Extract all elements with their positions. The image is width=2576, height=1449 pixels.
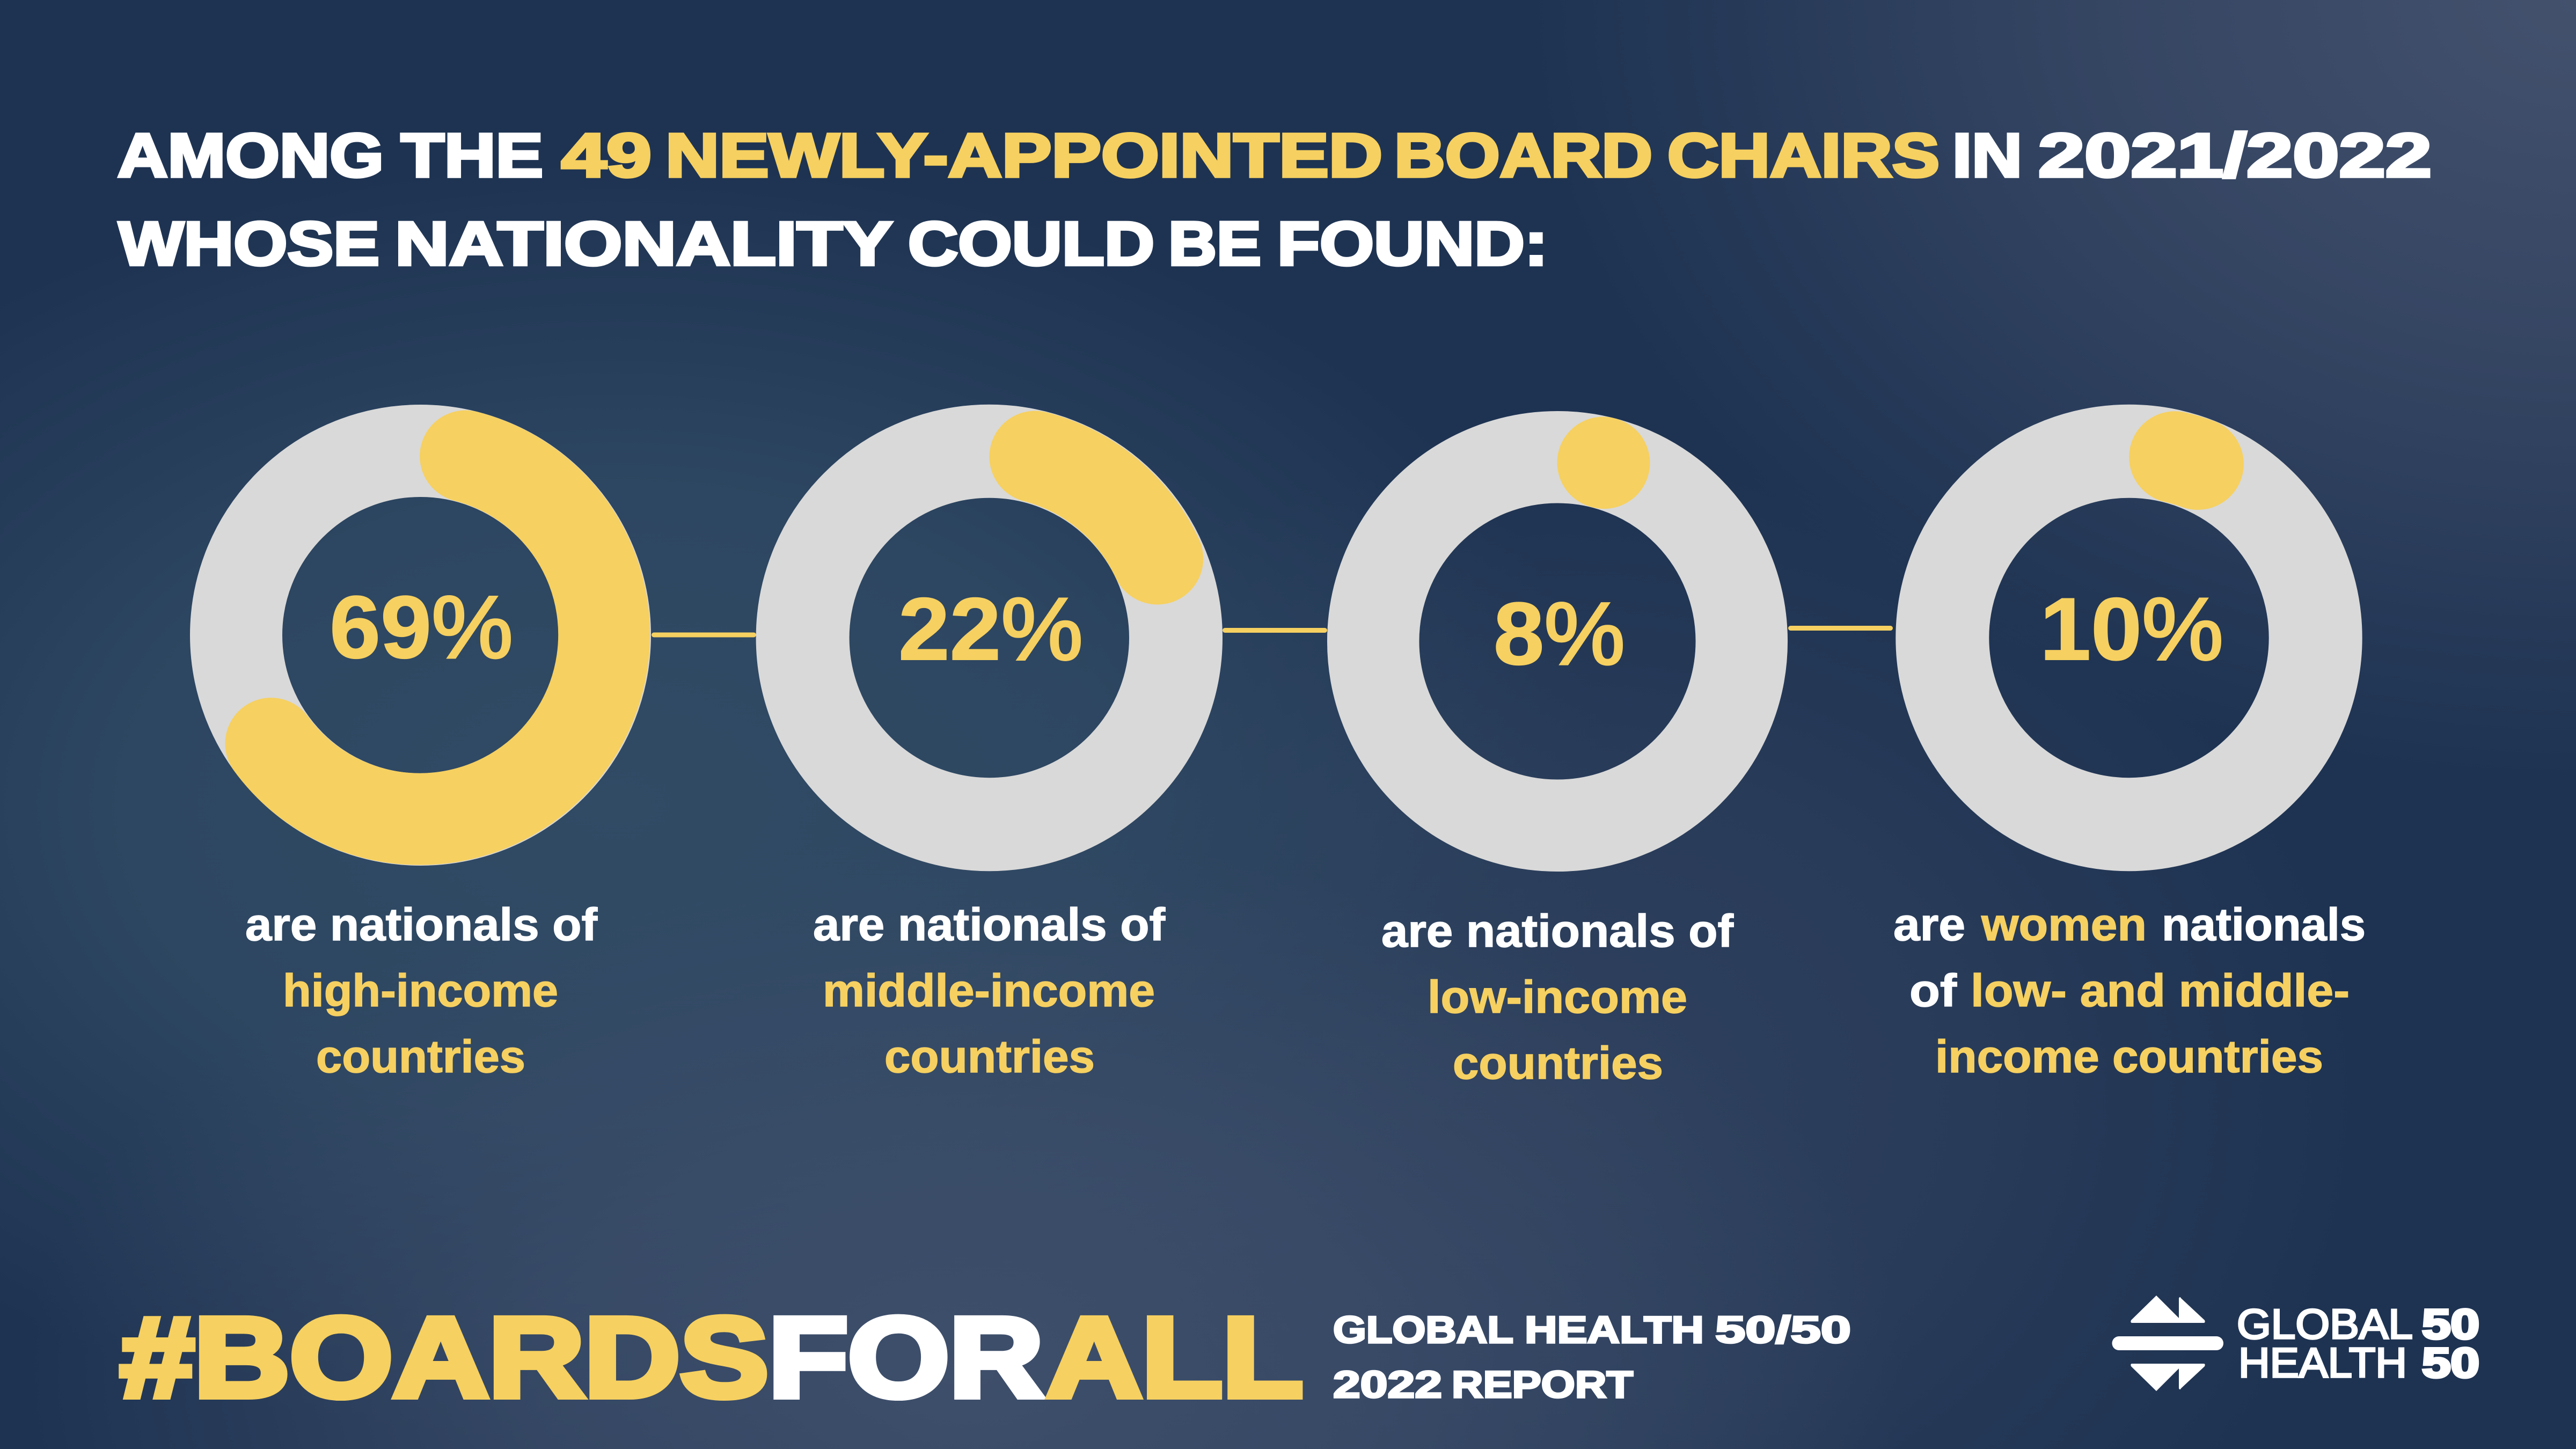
report credit: 2022 (1333, 1363, 1442, 1406)
label: high-income: are nationals of (245, 899, 598, 950)
label: low-income: are nationals of (1381, 906, 1734, 957)
report credit (1333, 1308, 1851, 1406)
label: high-income: countries (316, 1031, 525, 1082)
label: low-income (1381, 906, 1734, 1089)
donut chart: 22% middle-income (803, 451, 1176, 824)
label: middle-income: are nationals of (813, 899, 1166, 950)
donut chart: 10% women (1942, 451, 2316, 824)
donut chart: 8% low-income: 8% (1494, 584, 1625, 683)
title: NEWLY-APPOINTED (665, 121, 1382, 190)
title: NATIONALITY (395, 209, 892, 278)
logo wordmark: HEALTH (2238, 1339, 2407, 1386)
donut chart: 8% low-income (1373, 457, 1741, 825)
icon: logo mark (2112, 1296, 2223, 1391)
donut chart: 10% women: 10% (2040, 580, 2223, 678)
label: women nationals: income countries (1935, 1031, 2323, 1082)
hashtag (120, 1294, 1303, 1421)
label: middle-income: middle-income (823, 965, 1155, 1016)
report credit: GLOBAL (1333, 1308, 1513, 1351)
label: middle-income (813, 899, 1166, 1082)
title: BE (1168, 209, 1261, 278)
hashtag: #BOARDS (120, 1294, 769, 1421)
label: women nationals: of (1909, 965, 1957, 1016)
label: middle-income: countries (884, 1031, 1095, 1082)
report credit: HEALTH (1525, 1308, 1704, 1351)
donut chart: 69% high-income: 69% (330, 577, 513, 676)
title: WHOSE (119, 209, 379, 278)
title: AMONG (118, 121, 384, 190)
logo wordmark: 50 (2422, 1339, 2479, 1386)
title: CHAIRS (1667, 121, 1940, 190)
label: low-income: countries (1453, 1038, 1663, 1089)
title: IN (1952, 121, 2022, 190)
logo wordmark: GLOBAL (2237, 1300, 2413, 1348)
report credit: 50/50 (1715, 1308, 1851, 1351)
donut chart: 22% middle-income: 22% (898, 580, 1083, 678)
logo: Global Health 50/50 (2112, 1296, 2479, 1391)
hashtag: FOR (769, 1294, 1043, 1421)
label: women nationals: women (1981, 899, 2147, 950)
label: low-income: low-income (1428, 972, 1687, 1023)
title: THE (401, 121, 543, 190)
title: BOARD (1394, 121, 1652, 190)
title: 2021/2022 (2038, 121, 2432, 190)
label: women nationals (1893, 899, 2366, 1082)
title (118, 121, 2432, 278)
logo wordmark: 50 (2422, 1300, 2479, 1348)
label: women nationals: nationals (2162, 899, 2366, 950)
label: high-income: high-income (283, 965, 558, 1016)
donut chart: 69% high-income (236, 451, 605, 819)
title: COULD (908, 209, 1154, 278)
label: women nationals: are (1893, 899, 1965, 950)
label: high-income (245, 899, 598, 1082)
title: 49 (561, 121, 652, 190)
title: FOUND: (1277, 209, 1548, 278)
report credit: REPORT (1452, 1363, 1633, 1406)
hashtag: ALL (1046, 1294, 1303, 1421)
label: women nationals: low- and middle- (1971, 965, 2350, 1016)
logo wordmark (2237, 1300, 2479, 1386)
connector line 1 (652, 632, 756, 638)
connector line 3 (1788, 626, 1893, 631)
connector line 2 (1223, 628, 1327, 633)
